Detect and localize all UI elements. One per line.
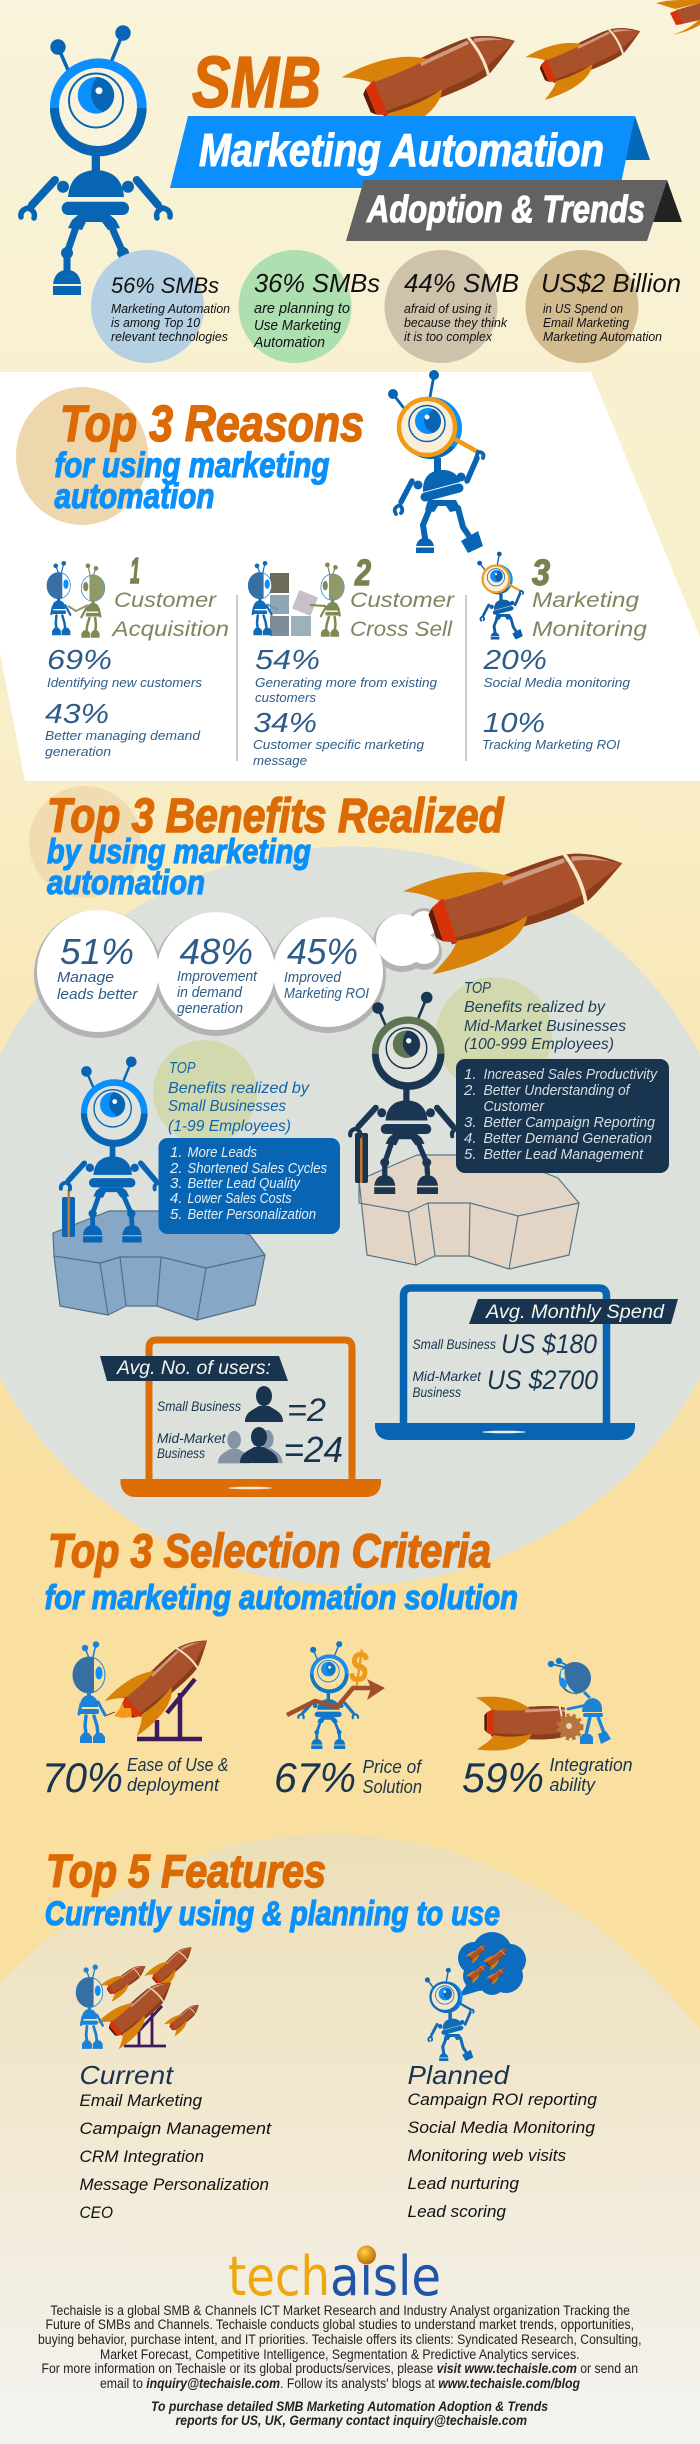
list: planned xyxy=(408,2060,598,2221)
heading: Top 5 Features: Top 5 Features xyxy=(46,1845,326,1897)
stat 43%: generation xyxy=(45,744,111,759)
panel: top 3 selection criteria xyxy=(42,1524,632,1801)
small business benefits list xyxy=(158,1138,340,1234)
illustration: robot with price arrow: $ xyxy=(349,1643,368,1692)
criterion 59%: Integration xyxy=(550,1755,632,1775)
criterion 67%: Solution xyxy=(362,1777,422,1797)
mid-market benefits heading: Mid-Market Businesses xyxy=(464,1018,626,1035)
stat 10% xyxy=(482,707,620,752)
mid-market benefits list xyxy=(456,1059,669,1173)
criterion 59% xyxy=(462,1754,632,1801)
list: planned: Monitoring web visits xyxy=(408,2146,567,2165)
users: small business: =2 xyxy=(287,1392,326,1428)
reason title: Customer xyxy=(114,589,217,612)
robot mascot xyxy=(21,25,170,295)
subheading: Currently using & planning to use xyxy=(45,1895,500,1933)
reason title: Monitoring xyxy=(532,618,647,641)
rocket: benefits xyxy=(403,823,637,977)
reason 2: customer cross sell xyxy=(248,552,455,768)
platform: beige xyxy=(359,1155,579,1269)
bubble 48%: Improvement xyxy=(177,968,258,985)
candle: small business robot xyxy=(62,1190,75,1237)
mid-market benefits heading: Benefits realized by xyxy=(464,999,606,1016)
heading: Top 3 Selection Criteria: Top 3 Selection Criteria xyxy=(48,1524,491,1577)
robot: small business xyxy=(61,1056,164,1243)
ribbon fold blue xyxy=(624,116,650,160)
reason title: Acquisition xyxy=(110,618,229,641)
banner: Avg. Monthly Spend: Avg. Monthly Spend xyxy=(485,1302,666,1323)
stat 10%: 10% xyxy=(483,707,545,738)
stat 34%: message xyxy=(253,753,307,768)
robot: mid-market xyxy=(350,992,462,1194)
stat 54%: Generating more from existing xyxy=(255,675,438,690)
bubble 51% xyxy=(57,931,139,1003)
spend: mid-market xyxy=(412,1365,598,1400)
icon: handshake robots xyxy=(47,561,105,638)
footer text: Future of SMBs and Channels. Techaisle conducts global studies to understand market trends, opportunities, xyxy=(46,2317,634,2332)
subheading: for using marketing automation: automation xyxy=(54,477,214,516)
ribbon: Adoption and Trends xyxy=(346,180,667,241)
stat 54% xyxy=(255,644,438,705)
spend: small business: Small Business xyxy=(412,1336,496,1352)
mid-market benefits list: Increased Sales Productivity xyxy=(484,1066,658,1083)
bubble 51%: leads better xyxy=(57,986,139,1003)
stat circle 36% xyxy=(238,250,380,363)
footer text: Market Forecast, Competitive Intelligence, Segmentation & Predictive Analytics services. xyxy=(100,2347,580,2362)
list: current: Email Marketing xyxy=(80,2091,203,2110)
reason 3: marketing monitoring xyxy=(477,552,647,752)
footer text: For more information on Techaisle or its global products/services, please visit www.techaisle.com or send an xyxy=(42,2361,638,2376)
criterion 67% xyxy=(274,1754,423,1801)
stat 34% xyxy=(253,707,425,768)
bubble 45%: Marketing ROI xyxy=(284,985,369,1002)
footer text xyxy=(38,2303,642,2428)
stat circle 44%: 44% SMB xyxy=(404,268,519,298)
heading: Top 3 Reasons: Top 3 Reasons xyxy=(60,395,364,452)
mid-market benefits list: 4. xyxy=(464,1130,477,1147)
criterion 70%: deployment xyxy=(127,1775,220,1795)
bottom fade arc xyxy=(0,1834,700,2444)
mid-market benefits list: Better Demand Generation xyxy=(484,1130,652,1147)
reason title: Marketing xyxy=(532,589,639,612)
stat 69% xyxy=(47,644,203,690)
footer text: Techaisle is a global SMB & Channels ICT Market Research and Industry Analyst organization Tracking the xyxy=(50,2303,630,2318)
mid-market benefits list: 2. xyxy=(463,1082,477,1099)
rocket: large header xyxy=(341,9,530,144)
criterion 70%: 70% xyxy=(42,1754,123,1801)
subheading: by using marketing automation xyxy=(47,833,311,902)
list: planned: Planned xyxy=(408,2060,511,2090)
robot with magnifier xyxy=(388,370,483,553)
stat 10%: Tracking Marketing ROI xyxy=(482,737,620,752)
stat 69%: 69% xyxy=(47,644,112,675)
exhaust cloud bubbles xyxy=(34,908,442,1038)
small business benefits list: 5. xyxy=(170,1206,183,1223)
reason 1: customer acquisition: 1 xyxy=(130,550,140,591)
reason title: Cross Sell xyxy=(350,618,453,641)
footer text: To purchase detailed SMB Marketing Automation Adoption & Trends xyxy=(151,2399,548,2414)
mid-market benefits list: Customer xyxy=(484,1098,545,1115)
logo: techaisle: tech xyxy=(228,2245,330,2308)
footer text: reports for US, UK, Germany contact inquiry@techaisle.com xyxy=(176,2413,527,2428)
list: current: Current xyxy=(80,2060,175,2090)
stat circle 56% xyxy=(91,250,230,363)
stat circle US$2 Billion: in US Spend on xyxy=(543,301,623,316)
users: mid-market: Mid-Market xyxy=(157,1430,227,1446)
criterion 59%: 59% xyxy=(462,1754,544,1801)
illustration: robot with gear and rocket xyxy=(476,1658,611,1751)
mid-market benefits heading xyxy=(464,980,626,1053)
subheading: for marketing automation solution xyxy=(45,1579,518,1617)
laptop: number of users xyxy=(100,1340,381,1497)
mid-market benefits list: Better Understanding of xyxy=(484,1082,631,1099)
illustration: planned features xyxy=(425,1932,526,2061)
stat circle 56%: is among Top 10 xyxy=(111,315,201,330)
stat circle US$2 Billion: Email Marketing xyxy=(543,315,630,330)
spend: small business: US $180 xyxy=(501,1329,597,1359)
subheading: for using marketing automation: for using marketing xyxy=(54,446,330,485)
small business benefits list: More Leads xyxy=(188,1144,257,1161)
reason title xyxy=(350,589,455,641)
bubble 48%: 48% xyxy=(180,931,253,972)
small business benefits list: Shortened Sales Cycles xyxy=(188,1160,327,1177)
icon: magnifier robot xyxy=(477,552,523,639)
large grey circle xyxy=(0,847,700,1585)
small business benefits list: Better Lead Quality xyxy=(188,1175,301,1192)
stat circle 36%: are planning to xyxy=(254,300,350,317)
illustration: robot with price arrow xyxy=(287,1641,385,1749)
bubble 45% xyxy=(284,931,369,1002)
users: small business: Small Business xyxy=(157,1398,241,1414)
small business benefits heading: (1-99 Employees) xyxy=(168,1118,291,1135)
footer text: email to inquiry@techaisle.com. Follow its analysts' blogs at www.techaisle.com/blog xyxy=(100,2376,581,2391)
mid-market benefits heading: TOP xyxy=(464,980,491,997)
ribbon: Adoption and Trends: Adoption & Trends xyxy=(366,189,645,231)
mid-market benefits list: 5. xyxy=(464,1146,477,1163)
stat circle 44%: because they think xyxy=(404,315,508,330)
criterion 70%: Ease of Use & xyxy=(127,1755,228,1775)
banner: Avg. No. of users xyxy=(100,1356,288,1381)
rocket: medium header xyxy=(525,10,651,101)
bubble 48%: generation xyxy=(177,1000,243,1017)
panel: top 3 reasons xyxy=(0,370,700,781)
logo: techaisle: aisle xyxy=(330,2245,441,2308)
stat 43% xyxy=(45,698,201,759)
banner: Avg. Monthly Spend xyxy=(469,1299,678,1324)
spend: mid-market: Mid-Market xyxy=(412,1368,482,1384)
mid-market benefits list: 1. xyxy=(464,1066,477,1083)
reason title xyxy=(532,589,647,641)
tan title circle xyxy=(29,786,141,898)
bubble 51%: Manage xyxy=(57,969,114,986)
stat circle 44%: afraid of using it xyxy=(404,301,492,316)
mid-market benefits heading: (100-999 Employees) xyxy=(464,1036,614,1053)
mid-market benefits list: Better Campaign Reporting xyxy=(484,1114,656,1131)
ribbon: Marketing Automation: Marketing Automation xyxy=(199,124,604,176)
mid-market benefits list: 3. xyxy=(464,1114,477,1131)
users: mid-market: =24 xyxy=(284,1429,343,1470)
stat 20%: 20% xyxy=(482,644,547,675)
green circle: small business xyxy=(153,1040,257,1144)
mid-market benefits list: Better Lead Management xyxy=(484,1146,644,1163)
small business benefits heading: Small Businesses xyxy=(168,1098,286,1115)
criterion 67%: Price of xyxy=(362,1757,423,1777)
small business benefits list: 3. xyxy=(170,1175,183,1192)
stat 34%: 34% xyxy=(254,707,317,738)
users: mid-market: Business xyxy=(157,1445,205,1461)
bubble 51%: 51% xyxy=(60,931,134,972)
stat circle 56%: 56% SMBs xyxy=(111,273,219,298)
stat circle 36%: 36% SMBs xyxy=(254,268,380,298)
stat circle 56%: relevant technologies xyxy=(111,329,228,344)
panel: top 5 features xyxy=(45,1845,598,2222)
stat 54%: 54% xyxy=(255,644,320,675)
stat circle US$2 Billion: Marketing Automation xyxy=(543,329,662,344)
white panel shape xyxy=(0,372,700,781)
subheading: by using marketing automation: automation xyxy=(47,864,205,902)
reason 1: customer acquisition xyxy=(45,550,229,759)
small business benefits list: Lower Sales Costs xyxy=(188,1190,292,1207)
reason title xyxy=(110,589,229,641)
reason number 3: 3 xyxy=(532,552,550,593)
stat circle 36%: Automation xyxy=(253,334,325,351)
spend: small business xyxy=(412,1329,597,1359)
tan title circle xyxy=(16,387,148,525)
list: planned: Lead scoring xyxy=(408,2202,507,2221)
spend: mid-market: Business xyxy=(412,1384,461,1400)
list: planned: Campaign ROI reporting xyxy=(408,2090,598,2109)
laptop: monthly spend xyxy=(375,1288,678,1440)
candle: mid-market robot xyxy=(355,1133,368,1183)
rocket: cropped top right xyxy=(656,0,700,35)
users: small business xyxy=(157,1386,326,1428)
ribbon fold dark xyxy=(653,180,682,222)
stat circle 44% xyxy=(384,250,519,363)
stat circle 56%: Marketing Automation xyxy=(111,301,230,316)
small business benefits heading: TOP xyxy=(169,1060,196,1077)
stat circle US$2 Billion xyxy=(526,250,681,363)
small business benefits list: 2. xyxy=(169,1160,183,1177)
panel: top 3 benefits xyxy=(0,786,700,1585)
stat 69%: Identifying new customers xyxy=(47,675,203,690)
stat 43%: Better managing demand xyxy=(45,728,201,743)
list: current: Campaign Management xyxy=(80,2119,272,2138)
small business benefits list: 4. xyxy=(170,1190,183,1207)
platform: blue xyxy=(53,1211,265,1320)
small business benefits list: Better Personalization xyxy=(188,1206,316,1223)
reason number 2: 2 xyxy=(354,552,371,593)
subheading: by using marketing automation: by using marketing xyxy=(47,833,311,871)
illustration: robot launching rocket xyxy=(73,1623,224,1743)
list: current xyxy=(80,2060,272,2222)
small business benefits heading xyxy=(168,1060,310,1135)
criterion 59%: ability xyxy=(550,1775,596,1795)
footer text: buying behavior, purchase intent, and IT priorities. Techaisle offers its clients: Syndicated Research, Consulting, xyxy=(38,2332,642,2347)
list: current: Message Personalization xyxy=(80,2175,269,2194)
list: current: CEO xyxy=(80,2203,113,2222)
list: planned: Lead nurturing xyxy=(408,2174,520,2193)
stat 34%: Customer specific marketing xyxy=(253,737,425,752)
stat 54%: customers xyxy=(255,690,316,705)
small business benefits list: 1. xyxy=(170,1144,183,1161)
criterion 67%: 67% xyxy=(274,1754,356,1801)
stat 20%: Social Media monitoring xyxy=(484,675,631,690)
green circle: mid-market xyxy=(436,977,552,1093)
ribbon: Marketing Automation xyxy=(170,116,635,188)
subheading: for using marketing automation xyxy=(54,446,330,516)
stat 20% xyxy=(482,644,631,690)
stat circle 44%: it is too complex xyxy=(404,329,492,344)
spend: mid-market: US $2700 xyxy=(487,1365,598,1395)
stat 43%: 43% xyxy=(45,698,109,729)
stat circle US$2 Billion: US$2 Billion xyxy=(541,268,681,298)
small business benefits heading: Benefits realized by xyxy=(168,1080,310,1097)
criterion 70% xyxy=(42,1754,228,1801)
header panel xyxy=(21,0,700,363)
heading: Top 3 Benefits Realized: Top 3 Benefits Realized xyxy=(47,790,505,843)
list: current: CRM Integration xyxy=(80,2147,204,2166)
illustration: current features xyxy=(76,1939,205,2050)
bubble 45%: 45% xyxy=(287,931,358,972)
title: SMB: SMB xyxy=(192,43,321,123)
icon: robots passing boxes xyxy=(248,561,344,637)
banner: Avg. No. of users: Avg. No. of users: xyxy=(116,1358,271,1379)
list: planned: Social Media Monitoring xyxy=(408,2118,596,2137)
bubble 48%: in demand xyxy=(177,984,243,1001)
stat circle 36%: Use Marketing xyxy=(254,317,342,334)
reason title: Customer xyxy=(350,589,455,612)
logo: techaisle xyxy=(228,2245,441,2308)
bubble 45%: Improved xyxy=(284,969,342,986)
bubble 48% xyxy=(177,931,258,1017)
users: mid-market xyxy=(157,1427,343,1470)
